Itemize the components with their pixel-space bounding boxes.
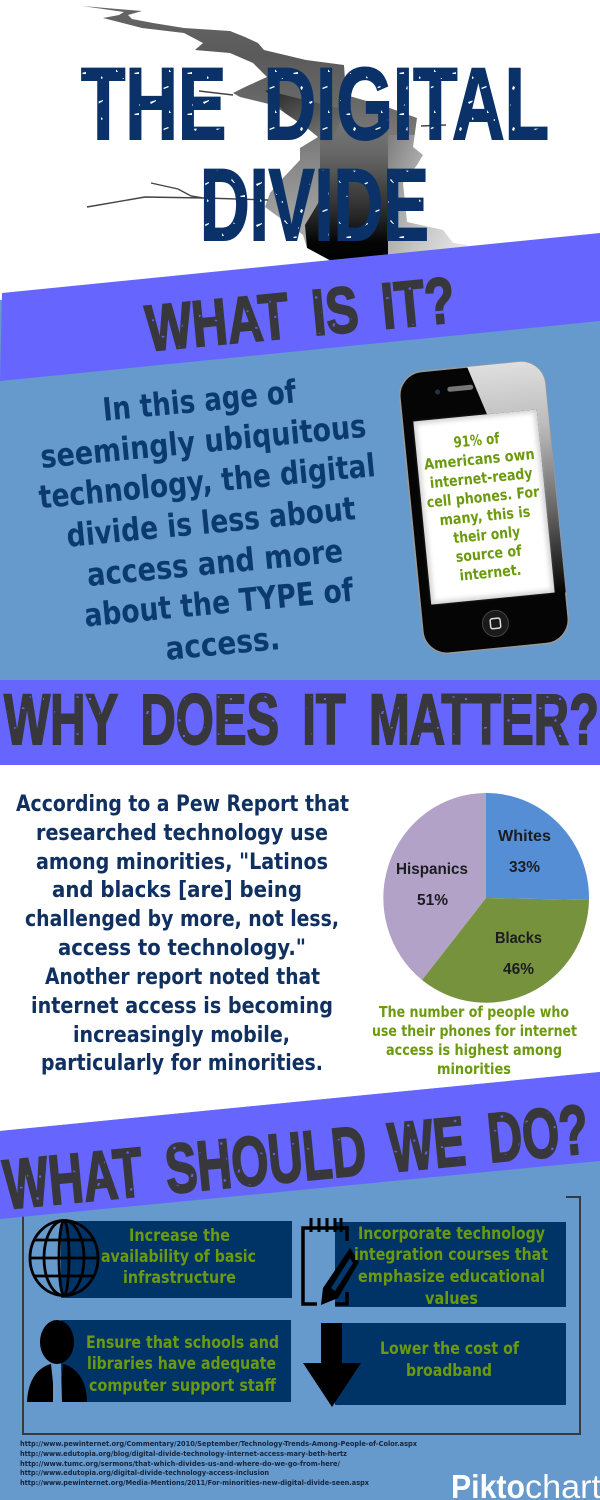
text block: pew report: and blacks [are] being: [52, 878, 302, 903]
slice: hispanics: [383, 793, 486, 980]
text block: definition: [29, 366, 393, 679]
text block: sources: http://www.edutopia.org/digital-divide-technology-access-inclusion: [20, 1469, 269, 1477]
text block: definition: access and more: [85, 532, 345, 594]
phone text: internet-ready: [429, 464, 533, 492]
phone text: many, this is: [439, 503, 531, 529]
icon: globe: [30, 1220, 98, 1296]
illustration: ground crack: [82, 6, 467, 260]
heading: what is it: WHAT IS IT?: [142, 263, 458, 365]
icon: notepad and pencil: [303, 1218, 359, 1305]
text block: pew report: researched technology use: [36, 821, 328, 846]
recommendation text: Increase the: [129, 1226, 230, 1246]
text block: definition: about the TYPE of: [83, 571, 356, 635]
frame: recommendations bracket: [23, 1197, 580, 1434]
home button: [481, 609, 510, 638]
pie labels: Whites: [498, 828, 551, 845]
recommendation text: computer support staff: [89, 1376, 276, 1396]
slice: blacks: [422, 898, 589, 1003]
chart caption: access is highest among: [386, 1041, 562, 1059]
text block: sources: [20, 1440, 417, 1487]
phone text: cell phones. For: [426, 483, 541, 512]
text block: pew report: [16, 792, 349, 1076]
phone text: internet.: [459, 561, 522, 585]
phone text: source of: [455, 542, 523, 566]
phone text: Americans own: [423, 445, 535, 474]
text block: pew report: Another report noted that: [45, 965, 320, 990]
recommendation text: [380, 1339, 519, 1381]
text block: pew report: access to technology.": [58, 936, 306, 961]
recommendation text: Ensure that schools and: [86, 1333, 279, 1353]
text block: sources: http://www.pewinternet.org/Media-Mentions/2011/For-minorities-new-digital-divide-seen.aspx: [20, 1479, 369, 1487]
banner: why does it matter: [0, 680, 600, 765]
recommendation text: Incorporate technology: [358, 1224, 545, 1244]
recommendation text: libraries have adequate: [87, 1354, 276, 1374]
banner: what is it: [0, 233, 600, 381]
logo: piktochart: [451, 1468, 600, 1500]
panel: what is it background: [0, 300, 600, 685]
pie labels: 46%: [503, 961, 534, 978]
recommendation text: Lower the cost of: [380, 1339, 519, 1359]
pie labels: 51%: [417, 892, 448, 909]
text block: definition: seemingly ubiquitous: [39, 407, 368, 476]
recommendation text: broadband: [406, 1361, 492, 1381]
text block: pew report: particularly for minorities.: [41, 1051, 323, 1076]
recommendation text: [354, 1224, 548, 1309]
text block: pew report: According to a Pew Report that: [16, 792, 349, 817]
recommendation: infrastructure: [30, 1220, 292, 1298]
phone text: 91% of: [453, 429, 501, 452]
banner: what should we do: [0, 1072, 600, 1224]
recommendation text: infrastructure: [123, 1268, 236, 1288]
title: [81, 47, 549, 262]
phone text: [420, 426, 548, 587]
recommendation text: integration courses that: [354, 1245, 548, 1265]
recommendation text: emphasize educational: [358, 1267, 545, 1287]
text block: definition: In this age of: [101, 372, 299, 429]
title: DIVIDE: [200, 148, 429, 262]
recommendation: technology integration: [303, 1218, 566, 1309]
recommendation text: [101, 1226, 256, 1288]
text block: sources: http://www.tumc.org/sermons/that-which-divides-us-and-where-do-we-go-from-here/: [20, 1460, 340, 1468]
panel: what should we do background: [0, 1072, 600, 1500]
pie labels: Hispanics: [396, 861, 468, 878]
recommendation text: availability of basic: [101, 1247, 256, 1267]
text block: sources: http://www.pewinternet.org/Commentary/2010/September/Technology-Trends-Among-People-of-Color.aspx: [20, 1440, 417, 1448]
text block: definition: divide is less about: [65, 489, 357, 555]
pie labels: 33%: [509, 859, 540, 876]
recommendation text: values: [425, 1289, 478, 1309]
icon: person: [27, 1320, 87, 1402]
pie chart: [383, 793, 589, 1003]
text block: pew report: challenged by more, not less,: [25, 907, 339, 932]
icon: down arrow: [303, 1323, 361, 1407]
pie labels: [396, 828, 551, 978]
chart caption: minorities: [437, 1060, 511, 1078]
text block: pew report: increasingly mobile,: [73, 1023, 290, 1048]
recommendation: support staff: [27, 1320, 291, 1402]
pie labels: Blacks: [495, 930, 542, 947]
text block: pew report: internet access is becoming: [31, 994, 333, 1019]
text block: definition: technology, the digital: [37, 446, 377, 516]
text block: pew report: among minorities, "Latinos: [36, 850, 328, 875]
text block: sources: http://www.edutopia.org/blog/digital-divide-technology-internet-access-mary-beth-hertz: [20, 1450, 347, 1458]
recommendation: broadband cost: [303, 1323, 566, 1407]
icon: smartphone: [397, 353, 575, 655]
chart caption: [372, 1003, 577, 1078]
phone screen: [413, 409, 555, 605]
text block: definition: access.: [164, 619, 282, 668]
recommendation text: [86, 1333, 279, 1396]
slice: whites: [486, 793, 589, 900]
phone text: their only: [453, 523, 521, 547]
